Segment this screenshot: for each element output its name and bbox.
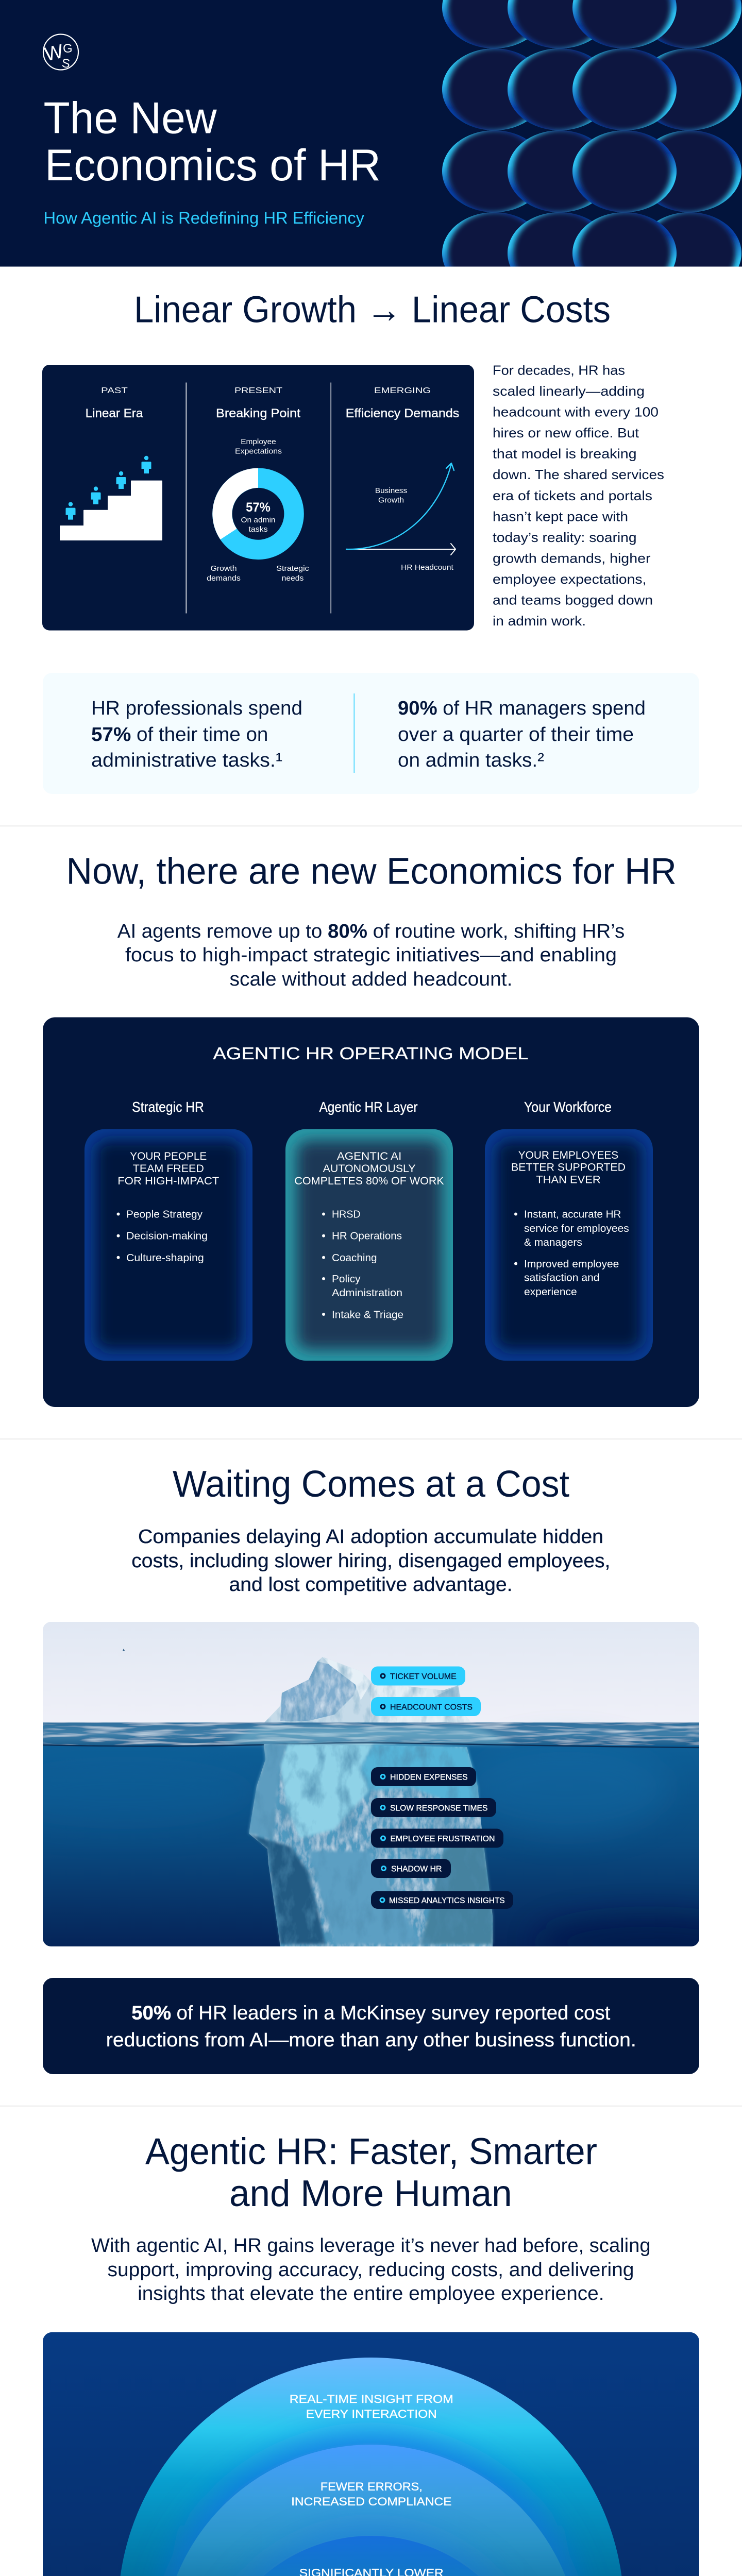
label: headcount costs: HEADCOUNT COSTS: [390, 1703, 473, 1711]
emerging column: Growth: [378, 496, 404, 505]
label: hidden expenses: [371, 1767, 476, 1786]
iceberg below water: [249, 1744, 493, 1946]
ring: fewer errors: INCREASED COMPLIANCE: [291, 2495, 451, 2508]
ring: real-time insight: EVERY INTERACTION: [306, 2408, 437, 2420]
column: your workforce: service for employees: [524, 1223, 629, 1234]
text block: hidden costs: [131, 1526, 610, 1596]
present column: Breaking Point: [216, 406, 300, 420]
text block: linear era explanation: hasn’t kept pace with: [493, 509, 628, 524]
text block: AI agents: scale without added headcount.: [230, 969, 512, 990]
text block: linear era explanation: that model is breaking: [493, 446, 637, 462]
stat: 90%: over a quarter of their time: [398, 724, 634, 745]
stat: 57%: HR professionals spend: [91, 698, 302, 719]
column: agentic HR layer: [285, 1099, 453, 1361]
ring: lower cost: [207, 2536, 535, 2576]
label: ticket volume: [371, 1666, 465, 1686]
past column: Linear Era: [86, 406, 143, 420]
donut chart: 57%: tasks: [248, 525, 268, 534]
donut labels: [207, 437, 309, 583]
column: your workforce: Improved employee: [524, 1259, 619, 1270]
stat: 90%: [398, 698, 646, 771]
present column: PRESENT: [234, 386, 282, 395]
panel: agentic HR operating model: [43, 1017, 699, 1407]
heading: faster smarter: Agentic HR: Faster, Smarter: [145, 2131, 597, 2172]
column: strategic HR: FOR HIGH-IMPACT: [117, 1175, 219, 1187]
stat: 57%: [91, 698, 302, 771]
donut chart: 57%: On admin: [241, 516, 275, 524]
text block: linear era explanation: era of tickets and portals: [493, 488, 652, 503]
heading: waiting: Waiting Comes at a Cost: [173, 1464, 569, 1505]
panel: concentric benefits diagram: [43, 2332, 699, 2576]
emerging column: HR Headcount: [401, 563, 454, 572]
column: strategic HR: YOUR PEOPLE: [130, 1150, 207, 1162]
column: your workforce: THAN EVER: [536, 1174, 601, 1186]
column: your workforce: [485, 1099, 653, 1361]
label: hidden expenses: HIDDEN EXPENSES: [390, 1773, 468, 1782]
panel: iceberg illustration: [43, 1622, 699, 1946]
column: your workforce: Instant, accurate HR: [524, 1209, 621, 1221]
column: agentic HR layer: Intake & Triage: [332, 1309, 403, 1320]
text block: linear era explanation: down. The shared services: [493, 467, 664, 482]
column: strategic HR: Strategic HR: [132, 1099, 204, 1115]
column: strategic HR: People Strategy: [126, 1209, 203, 1221]
text block: linear era explanation: [493, 363, 664, 629]
label: missed analytics insights: [371, 1891, 513, 1909]
text block: linear era explanation: today’s reality: soaring: [493, 530, 637, 545]
callout: McKinsey 50%: [43, 1978, 699, 2074]
ring: fewer errors: [162, 2445, 580, 2576]
text block: linear era explanation: growth demands, higher: [493, 550, 651, 566]
callout: McKinsey 50%: reductions from AI—more than any other business function.: [106, 2029, 636, 2051]
emerging column: [346, 386, 459, 572]
title: [43, 93, 381, 190]
label: headcount costs: [371, 1697, 481, 1716]
icon: staircase with people: [60, 456, 162, 540]
title: Economics of HR: [45, 141, 381, 190]
text block: AI agents: focus to high-impact strategic initiatives—and enabling: [125, 944, 617, 966]
text block: linear era explanation: employee expectations,: [493, 571, 646, 587]
text block: linear era explanation: hires or new office. But: [493, 425, 639, 440]
column: agentic HR layer: HRSD: [332, 1209, 361, 1221]
text block: hidden costs: and lost competitive advantage.: [229, 1574, 512, 1596]
text block: linear era explanation: in admin work.: [493, 613, 586, 629]
past column: PAST: [101, 386, 128, 395]
column: strategic HR: Culture-shaping: [126, 1252, 204, 1264]
column: agentic HR layer: Policy: [332, 1274, 361, 1285]
iceberg above water: [261, 1657, 474, 1726]
sea surface: [43, 1722, 699, 1748]
past column: [60, 386, 162, 540]
ring: fewer errors: FEWER ERRORS,: [321, 2480, 423, 2493]
present column: [207, 386, 309, 583]
panel: HR admin stats: [43, 673, 699, 794]
donut labels: Growth: [210, 564, 237, 573]
column: agentic HR layer: AUTONOMOUSLY: [323, 1163, 416, 1175]
label: employee frustration: [371, 1829, 503, 1848]
heading: faster smarter: [145, 2131, 597, 2214]
text block: agentic leverage: [91, 2235, 651, 2304]
donut labels: needs: [282, 574, 303, 583]
column: agentic HR layer: AGENTIC AI: [337, 1150, 401, 1162]
text block: agentic leverage: insights that elevate the entire employee experience.: [138, 2283, 604, 2304]
stat: 57%: administrative tasks.¹: [91, 750, 282, 771]
ring: real-time insight: [118, 2358, 624, 2576]
label: ticket volume: TICKET VOLUME: [390, 1672, 457, 1681]
text block: hidden costs: costs, including slower hiring, disengaged employees,: [131, 1550, 610, 1572]
stat: 57%: 57% of their time on: [91, 724, 268, 745]
heading: faster smarter: and More Human: [229, 2173, 512, 2214]
text block: linear era explanation: and teams bogged down: [493, 592, 653, 608]
column: agentic HR layer: Administration: [332, 1287, 402, 1299]
column: your workforce: Your Workforce: [524, 1099, 612, 1115]
stat: 90%: on admin tasks.²: [398, 750, 544, 771]
stat: 90%: 90% of HR managers spend: [398, 698, 646, 719]
decorative glowing ellipse pattern: [442, 0, 741, 295]
emerging column: Business: [375, 486, 407, 495]
heading: linear growth: Linear Growth → Linear Costs: [134, 290, 611, 331]
column: strategic HR: Decision-making: [126, 1231, 208, 1242]
column: agentic HR layer: Agentic HR Layer: [319, 1099, 417, 1115]
column: your workforce: experience: [524, 1286, 577, 1298]
ring: real-time insight: REAL-TIME INSIGHT FROM: [290, 2393, 453, 2405]
title: The New: [43, 93, 217, 143]
panel title: AGENTIC HR OPERATING MODEL: [213, 1044, 529, 1063]
logo: G: [63, 42, 73, 56]
label: employee frustration: EMPLOYEE FRUSTRATION: [391, 1835, 495, 1843]
text block: AI agents: AI agents remove up to 80% of routine work, shifting HR’s: [117, 921, 625, 942]
logo: W: [43, 41, 65, 65]
label: missed analytics insights: MISSED ANALYTICS INSIGHTS: [389, 1896, 505, 1905]
logo: S: [61, 56, 71, 71]
donut labels: Strategic: [276, 564, 309, 573]
emerging column: Efficiency Demands: [346, 406, 459, 420]
text block: agentic leverage: With agentic AI, HR gains leverage it’s never had before, scaling: [91, 2235, 651, 2257]
donut labels: demands: [207, 574, 241, 583]
label: shadow HR: [371, 1859, 451, 1878]
subtitle: How Agentic AI is Redefining HR Efficiency: [43, 209, 364, 227]
column: your workforce: YOUR EMPLOYEES: [518, 1149, 618, 1161]
column: strategic HR: TEAM FREED: [133, 1163, 204, 1175]
growth curve chart: [346, 463, 456, 555]
panel: past present emerging: [42, 365, 474, 631]
column: agentic HR layer: COMPLETES 80% OF WORK: [294, 1175, 444, 1187]
donut labels: Expectations: [235, 447, 282, 455]
column: your workforce: & managers: [524, 1237, 582, 1248]
text block: linear era explanation: For decades, HR has: [493, 363, 625, 378]
donut chart: 57%: [212, 468, 294, 550]
column: your workforce: BETTER SUPPORTED: [511, 1162, 626, 1174]
column: strategic HR: [85, 1099, 252, 1361]
text block: agentic leverage: support, improving accuracy, reducing costs, and delivering: [107, 2259, 634, 2281]
callout: McKinsey 50%: 50% of HR leaders in a McKinsey survey reported cost: [131, 2003, 611, 2024]
column: your workforce: satisfaction and: [524, 1273, 600, 1284]
text block: linear era explanation: headcount with every 100: [493, 404, 659, 420]
donut chart: 57%: 57%: [246, 500, 271, 515]
text block: AI agents: [117, 921, 625, 990]
label: slow response times: [371, 1798, 496, 1817]
logo: [43, 34, 78, 71]
label: shadow HR: SHADOW HR: [391, 1865, 442, 1873]
column: agentic HR layer: HR Operations: [332, 1231, 402, 1242]
column: agentic HR layer: Coaching: [332, 1252, 377, 1264]
heading: new economics: Now, there are new Economics for HR: [66, 851, 677, 892]
text block: hidden costs: Companies delaying AI adoption accumulate hidden: [138, 1526, 603, 1548]
hero banner: [0, 0, 742, 295]
text block: linear era explanation: scaled linearly—adding: [493, 383, 645, 399]
label: slow response times: SLOW RESPONSE TIMES: [390, 1804, 487, 1812]
emerging column: EMERGING: [374, 386, 431, 395]
donut labels: Employee: [241, 437, 276, 446]
